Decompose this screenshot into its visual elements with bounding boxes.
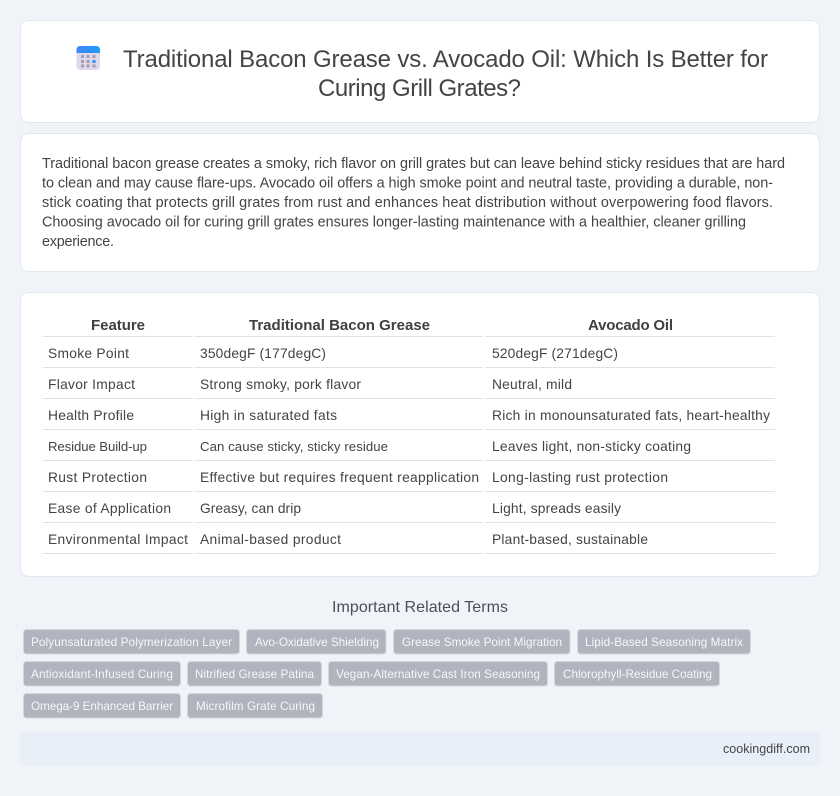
row: health profile bbox=[48, 408, 770, 423]
tags: related terms: Vegan-Alternative Cast Iron Seasoning bbox=[336, 668, 540, 681]
panel: comparison table bbox=[20, 292, 820, 576]
panel: introduction bbox=[20, 134, 820, 272]
title: Traditional Bacon Grease vs. Avocado Oil: Which Is Better for bbox=[123, 46, 768, 73]
row: environmental impact: Plant-based, sustainable bbox=[492, 532, 648, 547]
row: environmental impact: Animal-based product bbox=[200, 532, 341, 547]
text block: summary paragraph bbox=[42, 156, 785, 250]
row: health profile: Rich in monounsaturated fats, heart-healthy bbox=[492, 408, 770, 423]
tags: related terms: Antioxidant-Infused Curing bbox=[31, 668, 173, 681]
row: environmental impact bbox=[48, 532, 648, 547]
row: residue build-up: Residue Build-up bbox=[48, 439, 147, 454]
text block: summary paragraph: Choosing avocado oil for curing grill grates ensures longer-lasting maintenance with a healthier, cleaner grilling bbox=[42, 214, 746, 230]
table header: Traditional Bacon Grease bbox=[249, 317, 430, 334]
row: ease of application bbox=[48, 501, 621, 516]
text block: summary paragraph: to clean and may cause flare-ups. Avocado oil offers a high smoke point and neutral taste, providing a durable, non- bbox=[42, 176, 773, 192]
tags: related terms: Chlorophyll-Residue Coating bbox=[563, 668, 712, 681]
row: smoke point: 520degF (271degC) bbox=[492, 346, 618, 361]
text block: summary paragraph: stick coating that protects grill grates from rust and enhances heat distribution without overpowering food flavors. bbox=[42, 195, 773, 211]
title bbox=[123, 46, 768, 102]
tags: related terms: Grease Smoke Point Migration bbox=[402, 636, 562, 649]
title: Curing Grill Grates? bbox=[318, 75, 521, 102]
row: ease of application: Light, spreads easily bbox=[492, 501, 621, 516]
row: flavor impact bbox=[48, 377, 572, 392]
row: rust protection: Rust Protection bbox=[48, 470, 147, 485]
tags: related terms: Lipid-Based Seasoning Matrix bbox=[585, 636, 743, 649]
row: rust protection: Effective but requires frequent reapplication bbox=[200, 470, 479, 485]
tags: related terms: Microfilm Grate Curing bbox=[196, 700, 315, 713]
row: smoke point: Smoke Point bbox=[48, 346, 129, 361]
table header: Avocado Oil bbox=[588, 317, 673, 334]
tags: related terms: Nitrified Grease Patina bbox=[195, 668, 314, 681]
row: ease of application: Greasy, can drip bbox=[200, 501, 301, 516]
row: flavor impact: Flavor Impact bbox=[48, 377, 135, 392]
tags: related terms bbox=[24, 630, 750, 718]
row: flavor impact: Strong smoky, pork flavor bbox=[200, 377, 361, 392]
footer source text: cookingdiff.com bbox=[723, 742, 810, 756]
row: rust protection bbox=[48, 470, 668, 485]
table header: Feature bbox=[91, 317, 145, 334]
row: residue build-up: Can cause sticky, sticky residue bbox=[200, 439, 388, 454]
heading: related terms: Important Related Terms bbox=[332, 599, 508, 616]
row: residue build-up bbox=[48, 439, 691, 454]
icon: calendar bbox=[76, 46, 100, 70]
header panel bbox=[20, 20, 820, 122]
tags: related terms: Polyunsaturated Polymerization Layer bbox=[31, 636, 232, 649]
row: ease of application: Ease of Application bbox=[48, 501, 171, 516]
row: rust protection: Long-lasting rust protection bbox=[492, 470, 668, 485]
row: smoke point: 350degF (177degC) bbox=[200, 346, 326, 361]
row: flavor impact: Neutral, mild bbox=[492, 377, 572, 392]
row: smoke point bbox=[48, 346, 618, 361]
row: health profile: High in saturated fats bbox=[200, 408, 337, 423]
footer bar bbox=[20, 732, 820, 766]
text block: summary paragraph: Traditional bacon grease creates a smoky, rich flavor on grill grates but can leave behind sticky residues that are hard bbox=[42, 156, 785, 172]
row: health profile: Health Profile bbox=[48, 408, 134, 423]
tags: related terms: Avo-Oxidative Shielding bbox=[255, 636, 379, 649]
row: residue build-up: Leaves light, non-sticky coating bbox=[492, 439, 691, 454]
row: environmental impact: Environmental Impact bbox=[48, 532, 188, 547]
table header bbox=[91, 317, 673, 334]
text block: summary paragraph: experience. bbox=[42, 234, 114, 250]
tags: related terms: Omega-9 Enhanced Barrier bbox=[31, 700, 173, 713]
